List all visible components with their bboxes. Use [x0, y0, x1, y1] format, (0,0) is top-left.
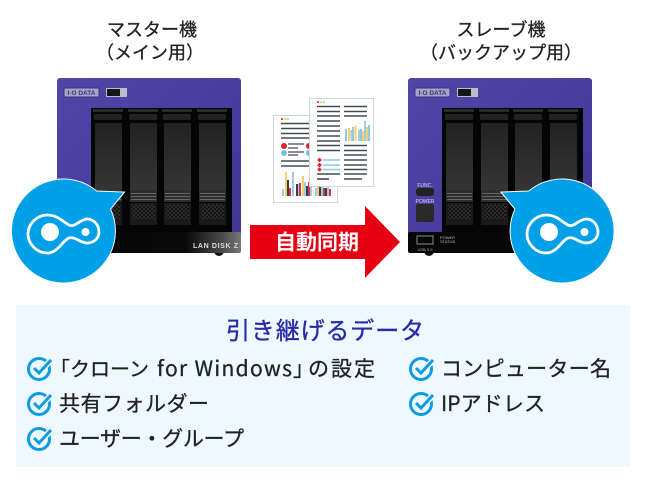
icon: clone loop symbol — [527, 215, 598, 253]
badge: master clone icon — [12, 179, 124, 282]
list item: shared folder: 共有フォルダー — [59, 388, 209, 418]
heading: master unit: （メイン用） — [105, 39, 195, 65]
heading: slave unit: スレーブ機 — [457, 16, 545, 42]
list item: clone settings: 」 — [293, 353, 304, 383]
list item: users and groups: ユーザー・グループ — [59, 423, 244, 453]
icon: back document — [274, 98, 374, 202]
list item: clone settings: の設定 — [308, 353, 375, 383]
device: slave NAS: USB 3.0 — [418, 247, 433, 252]
icon: front document — [310, 98, 374, 186]
heading: master unit: マスター機 — [107, 16, 197, 42]
device: slave NAS: POWER — [440, 235, 455, 240]
heading: master unit — [105, 16, 197, 65]
list item: IP address: IPアドレス — [441, 388, 545, 418]
icon: clone loop symbol — [28, 215, 99, 253]
device: slave NAS: POWER — [416, 199, 435, 205]
panel: data carried over — [16, 305, 630, 467]
list item: clone settings: 「クローン — [60, 353, 149, 382]
list item: clone settings — [28, 353, 375, 383]
list item: clone settings: for Windows — [157, 353, 292, 383]
heading: slave unit: （バックアップ用） — [429, 39, 573, 65]
device: slave NAS: FUNC. — [417, 183, 433, 189]
heading: slave unit — [429, 16, 573, 65]
panel heading: 引き継げるデータ — [226, 311, 424, 346]
device: master NAS — [57, 78, 241, 256]
device: master NAS: LAN DISK Z — [193, 243, 239, 250]
arrow: auto sync — [250, 206, 400, 278]
device: slave NAS: STATUS — [440, 239, 456, 244]
badge: slave clone icon — [502, 179, 614, 282]
list item: computer name: コンピューター名 — [441, 353, 611, 383]
arrow: auto sync: 自動同期 — [275, 226, 359, 256]
device: slave NAS — [408, 78, 592, 256]
